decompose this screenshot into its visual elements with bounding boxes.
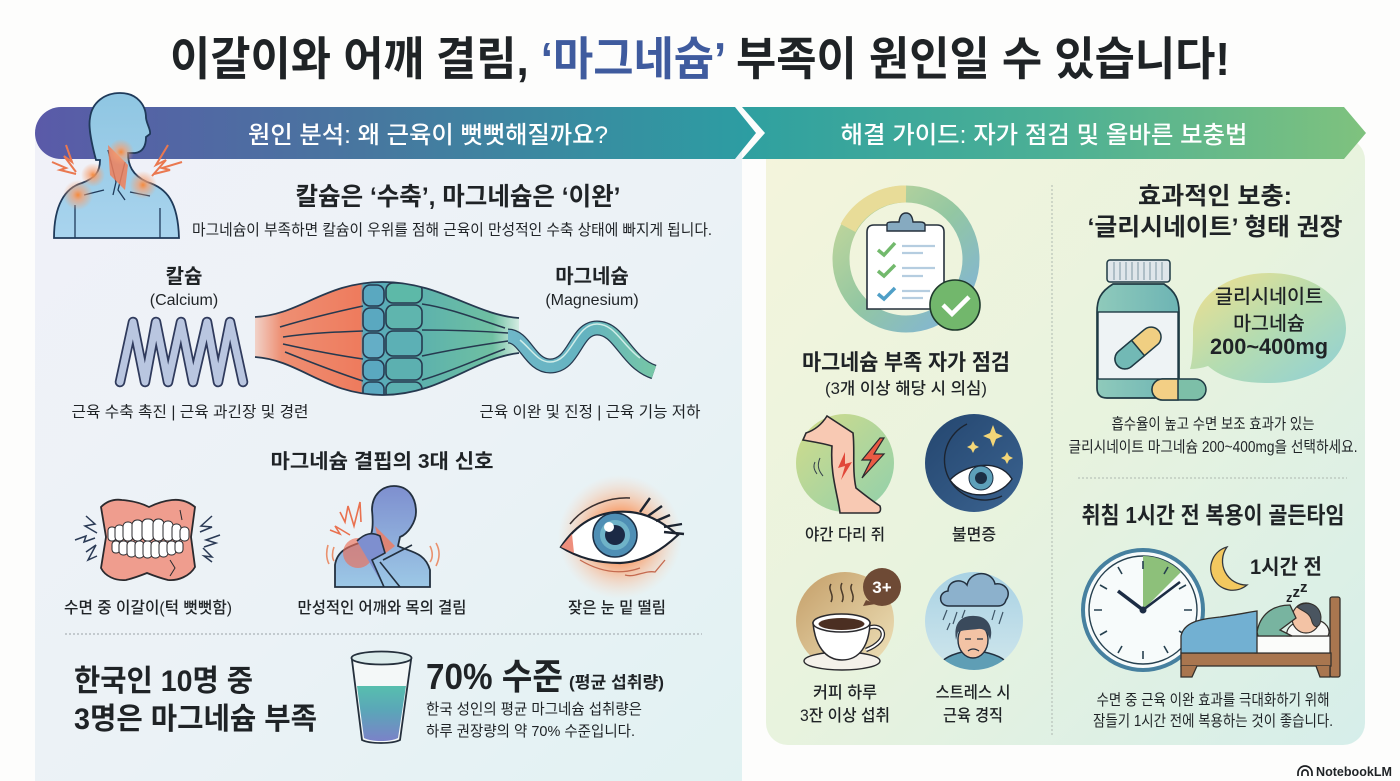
icon: clock	[1083, 550, 1203, 670]
statistic: 3 in 10 Koreans: 한국인 10명 중	[74, 665, 253, 698]
icon: stress	[925, 572, 1023, 672]
icon: coffee	[796, 572, 894, 670]
icon: neck and shoulder stiffness	[327, 486, 439, 587]
text: calcium effects: 근육 수축 촉진 | 근육 과긴장 및 경련	[72, 403, 308, 421]
icon: checklist	[841, 194, 980, 330]
callout: glycinate dosage: 마그네슘	[1233, 313, 1305, 335]
label: magnesium: (Magnesium)	[545, 292, 639, 309]
statistic: 70 percent: 70% 수준	[426, 656, 563, 697]
icon: water glass 70 percent	[352, 652, 412, 743]
label: coffee: 3잔 이상 섭취	[800, 706, 890, 725]
callout: glycinate dosage: 200~400mg	[1210, 334, 1328, 359]
label: magnesium: 마그네슘	[555, 265, 629, 288]
banner: cause analysis	[35, 107, 756, 159]
illustration: contracted spring	[120, 322, 243, 382]
callout: glycinate dosage	[1190, 273, 1346, 383]
icon: teeth grinding	[75, 500, 220, 580]
statistic: 3 in 10 Koreans: 3명은 마그네슘 부족	[74, 703, 317, 736]
text: intake explanation	[426, 701, 642, 740]
icon: crescent moon	[1211, 547, 1247, 590]
heading: effective supplement: 효과적인 보충:	[1138, 183, 1292, 210]
label: teeth grinding: 수면 중 이갈이(턱 뻣뻣함)	[64, 599, 232, 617]
text: glycinate advice: 흡수율이 높고 수면 보조 효과가 있는	[1112, 415, 1314, 433]
illustration: person sleeping in bed	[1181, 597, 1340, 677]
panel: cause analysis	[35, 93, 756, 781]
label: coffee	[800, 683, 890, 725]
statistic: 3 in 10 Koreans	[74, 665, 317, 736]
icon: insomnia	[925, 414, 1023, 512]
text: timing advice: 수면 중 근육 이완 효과를 극대화하기 위해	[1096, 691, 1330, 709]
text: timing advice: 잠들기 1시간 전에 복용하는 것이 좋습니다.	[1093, 712, 1333, 730]
label: coffee: 커피 하루	[813, 683, 877, 702]
icon: eye twitching	[558, 475, 684, 599]
text: self check note: (3개 이상 해당 시 의심)	[825, 379, 987, 398]
statistic: 70 percent	[426, 656, 664, 697]
text: magnesium effects: 근육 이완 및 진정 | 근육 기능 저하	[480, 403, 700, 421]
label: calcium: 칼슘	[166, 265, 202, 288]
icon: leg cramps	[796, 414, 894, 513]
callout: glycinate dosage: 글리시네이트	[1215, 286, 1323, 308]
label: insomnia: 불면증	[952, 526, 996, 544]
label: calcium: (Calcium)	[150, 292, 218, 309]
icon: zzz: z	[1300, 579, 1308, 596]
text: glycinate advice	[1068, 415, 1358, 456]
heading: calcium contracts, magnesium relaxes: 칼슘은 ‘수축’, 마그네슘은 ‘이완’	[296, 183, 620, 211]
icon: 3+ cups badge	[863, 568, 901, 606]
heading: three signals: 마그네슘 결핍의 3대 신호	[270, 450, 494, 473]
panel background	[766, 138, 1365, 745]
title: 이갈이와 어깨 결림, ‘마그네슘’ 부족이 원인일 수 있습니다!	[170, 33, 1230, 85]
label: stress: 근육 경직	[943, 706, 1003, 725]
illustration: muscle bundle	[255, 282, 519, 402]
heading: effective supplement: ‘글리시네이트’ 형태 권장	[1088, 214, 1342, 241]
icon: neck and shoulder pain figure	[52, 93, 182, 238]
label: stress: 스트레스 시	[936, 683, 1010, 702]
banner: solution guide	[742, 107, 1366, 159]
label: calcium	[150, 265, 218, 309]
banner: cause analysis: 원인 분석: 왜 근육이 뻣뻣해질까요?	[248, 122, 608, 149]
heading: self check: 마그네슘 부족 자가 점검	[802, 350, 1010, 375]
watermark: NotebookLM: NotebookLM	[1316, 764, 1392, 779]
text: explanation: 마그네슘이 부족하면 칼슘이 우위를 점해 근육이 만성적인 수축 상태에 빠지게 됩니다.	[192, 221, 712, 239]
text: timing advice	[1093, 691, 1333, 730]
text: intake explanation: 하루 권장량의 약 70% 수준입니다.	[426, 723, 635, 740]
icon: 3+ cups badge: 3+	[872, 578, 892, 597]
label: magnesium	[545, 265, 639, 309]
label: one hour before: 1시간 전	[1250, 556, 1322, 579]
label: stiffness: 만성적인 어깨와 목의 결림	[298, 599, 466, 617]
label: leg cramps: 야간 다리 쥐	[805, 526, 885, 544]
heading: effective supplement	[1088, 183, 1342, 241]
text: intake explanation: 한국 성인의 평균 마그네슘 섭취량은	[426, 701, 642, 718]
heading: golden time: 취침 1시간 전 복용이 골든타임	[1082, 502, 1344, 528]
illustration: relaxed wave	[508, 324, 654, 372]
icon: zzz: z	[1286, 590, 1292, 605]
statistic: 70 percent: (평균 섭취량)	[569, 673, 664, 692]
panel: solution guide	[742, 107, 1366, 745]
label: eye twitch: 잦은 눈 밑 떨림	[568, 599, 666, 617]
icon: zzz: z	[1292, 584, 1300, 601]
banner: solution guide: 해결 가이드: 자가 점검 및 올바른 보충법	[840, 122, 1248, 149]
panel background	[35, 130, 742, 781]
icon: supplement bottle	[1097, 260, 1206, 400]
label: stress	[936, 683, 1010, 725]
text: glycinate advice: 글리시네이트 마그네슘 200~400mg을 선택하세요.	[1068, 438, 1358, 456]
